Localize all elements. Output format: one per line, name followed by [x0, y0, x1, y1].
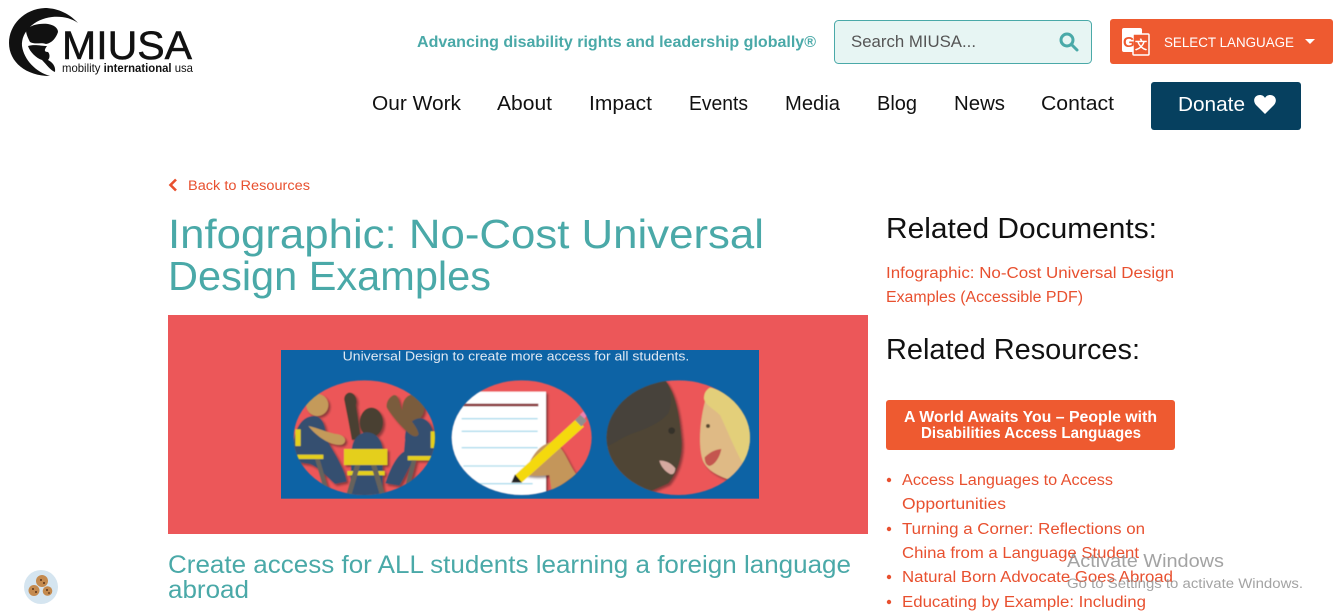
- icon: classroom students: [294, 380, 436, 497]
- title: [168, 211, 764, 299]
- resource button: A World Awaits You – People with: [904, 409, 1157, 426]
- icon: crescent and globe: [9, 8, 78, 76]
- subheading: [168, 551, 851, 604]
- document link: Infographic: No-Cost Universal Design: [886, 265, 1174, 282]
- navigation: Media: [785, 93, 841, 115]
- language label: SELECT LANGUAGE: [1164, 34, 1294, 50]
- title: Infographic: No-Cost Universal: [168, 211, 764, 257]
- title: Design Examples: [168, 253, 491, 299]
- icon: translate: G: [1123, 34, 1135, 51]
- icon: translate: [1122, 28, 1149, 55]
- document link: [886, 265, 1174, 306]
- icon: hand writing on paper: [447, 380, 592, 498]
- resource list: Opportunities: [902, 496, 1006, 513]
- windows activation watermark: Activate Windows: [1067, 551, 1224, 571]
- icon: caret: [1305, 39, 1315, 44]
- icon: magnifier: [1061, 34, 1077, 50]
- resource list: Natural Born Advocate Goes Abroad: [902, 569, 1173, 586]
- search placeholder: Search MIUSA...: [851, 32, 976, 51]
- resource list: Turning a Corner: Reflections on: [902, 521, 1145, 538]
- subheading: Create access for ALL students learning a foreign language: [168, 551, 851, 579]
- logo: MIUSA: [9, 8, 193, 76]
- donate button: [1151, 82, 1301, 130]
- navigation: News: [954, 93, 1005, 115]
- heading: related documents: Related Documents:: [886, 213, 1157, 245]
- donate label: Donate: [1178, 93, 1245, 116]
- icon: two faces talking: [603, 380, 753, 495]
- navigation: Events: [689, 93, 748, 115]
- slogan: Advancing disability rights and leadership globally®: [417, 34, 816, 51]
- windows activation watermark: Go to Settings to activate Windows.: [1067, 576, 1303, 591]
- icon: translate: 文: [1135, 37, 1148, 52]
- document link: Examples (Accessible PDF): [886, 289, 1083, 306]
- navigation: Contact: [1041, 93, 1114, 115]
- language button: [1110, 19, 1333, 64]
- banner caption: Universal Design to create more access for all students.: [343, 349, 689, 364]
- heading: related resources: Related Resources:: [886, 334, 1140, 366]
- navigation: Blog: [877, 93, 917, 115]
- navigation: About: [497, 93, 552, 115]
- icon: chevron: [170, 180, 176, 190]
- resource list: Educating by Example: Including: [902, 594, 1146, 611]
- navigation: [372, 93, 1114, 115]
- resource list: Access Languages to Access: [902, 472, 1113, 489]
- search box: [834, 20, 1092, 64]
- resource button: [886, 400, 1175, 450]
- back link: Back to Resources: [188, 178, 310, 193]
- icon: cookie button: [24, 570, 58, 604]
- resource list: [887, 472, 1173, 611]
- blue banner: [281, 349, 759, 499]
- subheading: abroad: [168, 576, 249, 604]
- tagline: mobility international usa: [62, 61, 193, 75]
- panel: sidebar: [886, 213, 1175, 611]
- navigation: Our Work: [372, 93, 462, 115]
- windows activation watermark: [1067, 551, 1303, 591]
- navigation: Impact: [589, 93, 652, 115]
- resource button: Disabilities Access Languages: [921, 425, 1141, 442]
- panel: infographic image: [168, 315, 868, 534]
- icon: heart: [1254, 95, 1276, 114]
- resource list: China from a Language Student: [902, 545, 1140, 562]
- wordmark: MIUSA: [62, 24, 192, 68]
